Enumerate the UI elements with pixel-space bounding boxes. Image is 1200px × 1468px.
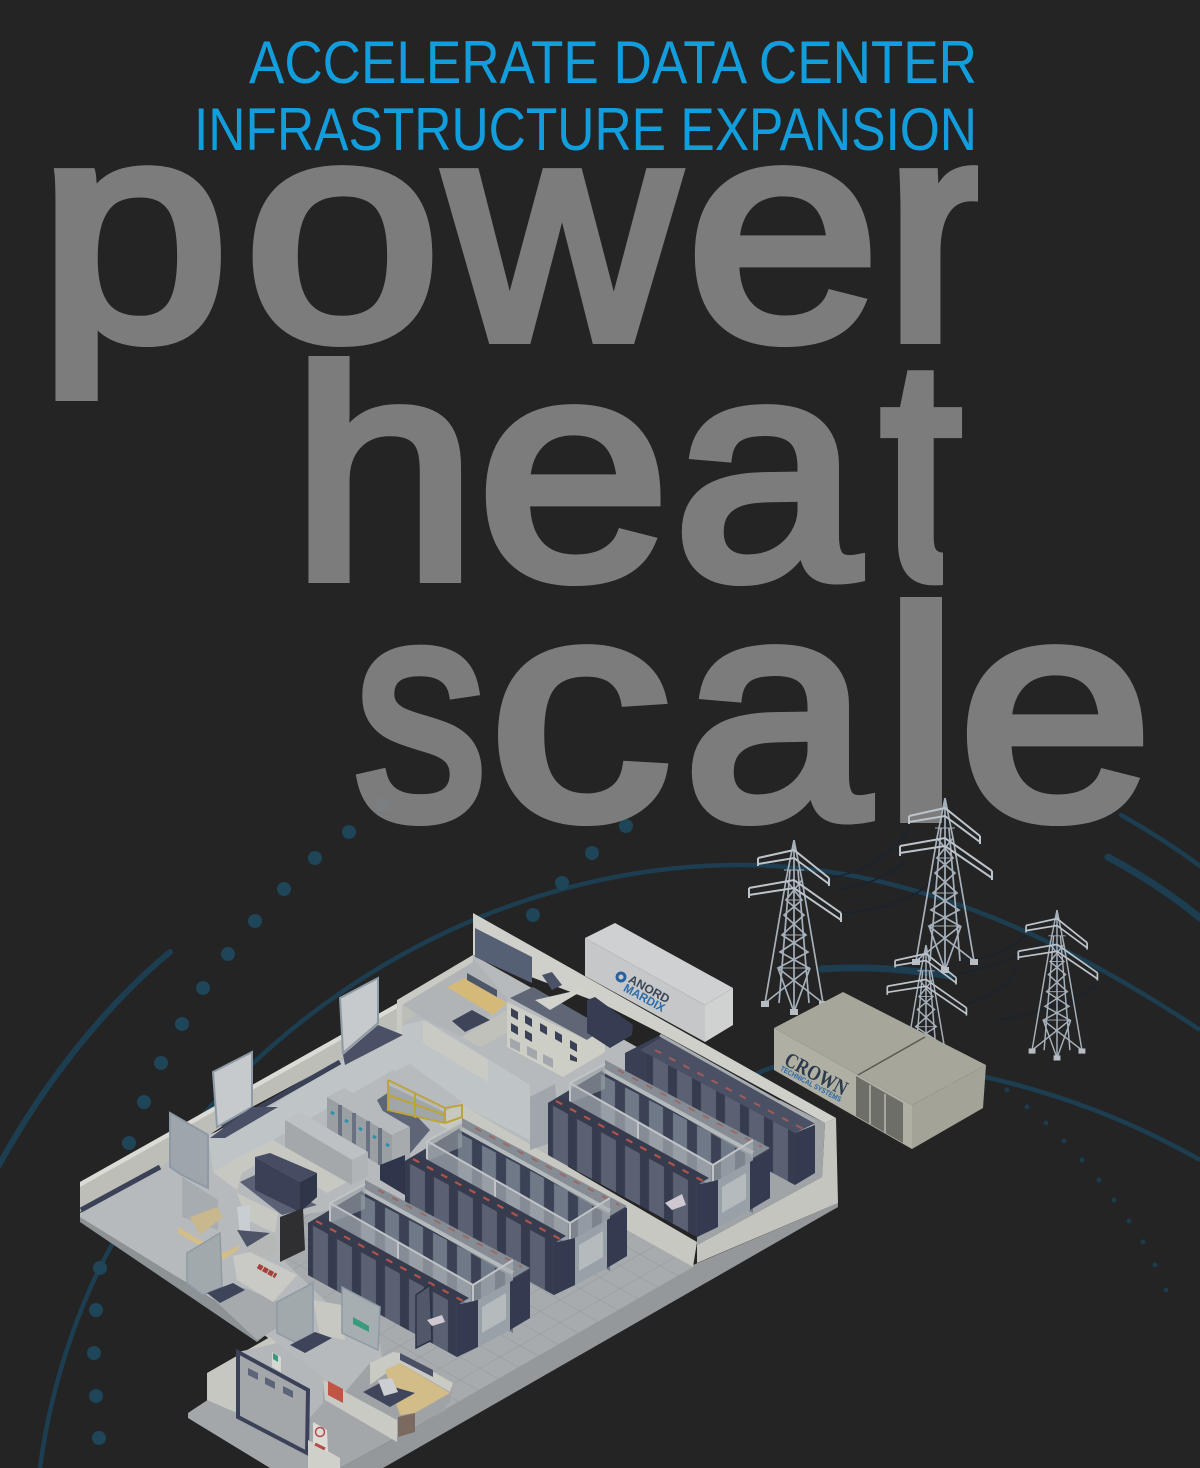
right perimeter wall [473, 913, 836, 1123]
logo: Anord Mardix: MARDIX [621, 981, 667, 1015]
main large arc [40, 865, 1200, 1468]
video wall [475, 928, 532, 983]
reception desk [178, 1205, 278, 1263]
logo: Anord Mardix [609, 966, 672, 1015]
server pod 1 [308, 1180, 530, 1357]
title: ACCELERATE DATA CENTER [249, 29, 977, 96]
upper right thick arc [1108, 857, 1200, 918]
word: scale: s [354, 536, 487, 884]
UPS cabinet row, tall [327, 1088, 430, 1172]
loading dock [188, 1337, 397, 1468]
switchgear cabinets [255, 1153, 317, 1212]
plant block with windows [507, 987, 633, 1077]
word: scale: a [684, 537, 871, 884]
upper right short arc [1121, 815, 1200, 866]
double door near [210, 1052, 278, 1138]
word: heat [291, 295, 963, 644]
pylon group [749, 798, 1097, 1096]
pylon 2 [900, 798, 992, 973]
extinguisher shelf [233, 1252, 297, 1302]
transmission wires [829, 828, 1097, 1020]
entry doors [277, 1283, 380, 1353]
serving cart [427, 1315, 445, 1326]
cold aisle cabinet [380, 1155, 405, 1195]
roof bench [535, 988, 587, 1010]
control room [397, 928, 562, 1082]
dotted trail right [1004, 1088, 1168, 1292]
fire notice [328, 1381, 343, 1403]
glass door lobby [170, 1113, 218, 1230]
wall base shadow [81, 1062, 340, 1210]
inner thick arc [822, 968, 950, 976]
lower corridor floor [207, 1288, 282, 1340]
word: power: w [442, 56, 681, 405]
tiled data hall floor [285, 1200, 693, 1437]
hall entry door [530, 1084, 560, 1150]
word: power: r [884, 57, 992, 405]
security office [323, 1352, 453, 1442]
title [194, 29, 977, 163]
Crown power module [774, 992, 986, 1149]
word: heat: h [291, 297, 477, 644]
left thick arc [0, 952, 170, 1167]
background arcs and dotted trails [0, 798, 1200, 1468]
server pod 3 [548, 1060, 770, 1237]
room partition [423, 1020, 488, 1082]
wall screen [542, 972, 562, 990]
word: heat: a [674, 297, 861, 644]
double door far [340, 978, 403, 1065]
operator desk [447, 978, 507, 1015]
lower right arc [755, 1061, 1200, 1160]
Anord Mardix enclosure [585, 923, 733, 1042]
long back wall [80, 955, 473, 1212]
pylon 3 [887, 945, 966, 1096]
title: INFRASTRUCTURE EXPANSION [194, 96, 977, 163]
word: scale: e [958, 536, 1153, 884]
desk monitors [467, 973, 497, 997]
partition around switchgear [213, 1140, 347, 1233]
pylon 1 [749, 840, 841, 1015]
dotted trail left [87, 798, 633, 1445]
hall divider band [440, 1092, 697, 1267]
floor strip at right wall [697, 1100, 825, 1245]
exit sign [353, 1317, 369, 1332]
server pod 2 [405, 1118, 627, 1295]
low front wall [697, 1118, 838, 1263]
word: power: o [244, 56, 441, 405]
word: scale: c [489, 535, 671, 884]
aisle door [416, 1285, 432, 1348]
exit sign dock [272, 1352, 281, 1372]
slab edge right [340, 1203, 838, 1468]
no smoking sign [308, 1422, 340, 1468]
operator chair [452, 1010, 490, 1032]
slab edge left [80, 1215, 285, 1342]
dark cabinets [587, 997, 633, 1048]
roller shutter [238, 1352, 308, 1453]
logo: Crown Technical Systems: TECHNICAL SYSTEMS [779, 1064, 843, 1104]
headline words [54, 165, 1144, 826]
office front wall [323, 1380, 397, 1442]
upper corridor floor [208, 1020, 530, 1172]
word: heat: t [881, 295, 963, 644]
word: power [54, 165, 978, 401]
battery cabinet row, short [285, 1112, 368, 1185]
pylon 4 [1018, 910, 1097, 1060]
word: power: e [686, 57, 880, 406]
logo: Crown Technical Systems: CROWN [781, 1047, 852, 1100]
main floor [80, 955, 660, 1395]
data center floor plan [80, 913, 838, 1468]
word: power: p [38, 56, 229, 407]
word: heat: e [477, 295, 670, 644]
crash cart [665, 1194, 686, 1210]
word: scale: l [883, 536, 959, 884]
yellow storage rack [388, 1064, 462, 1123]
word: scale [356, 597, 1144, 826]
logo: Anord Mardix: ANORD [626, 972, 672, 1006]
server pod 4 [625, 1035, 815, 1185]
lobby glass doors [187, 1233, 245, 1303]
black electrical cabinet [280, 1208, 305, 1262]
dock inner wall [238, 1343, 323, 1420]
